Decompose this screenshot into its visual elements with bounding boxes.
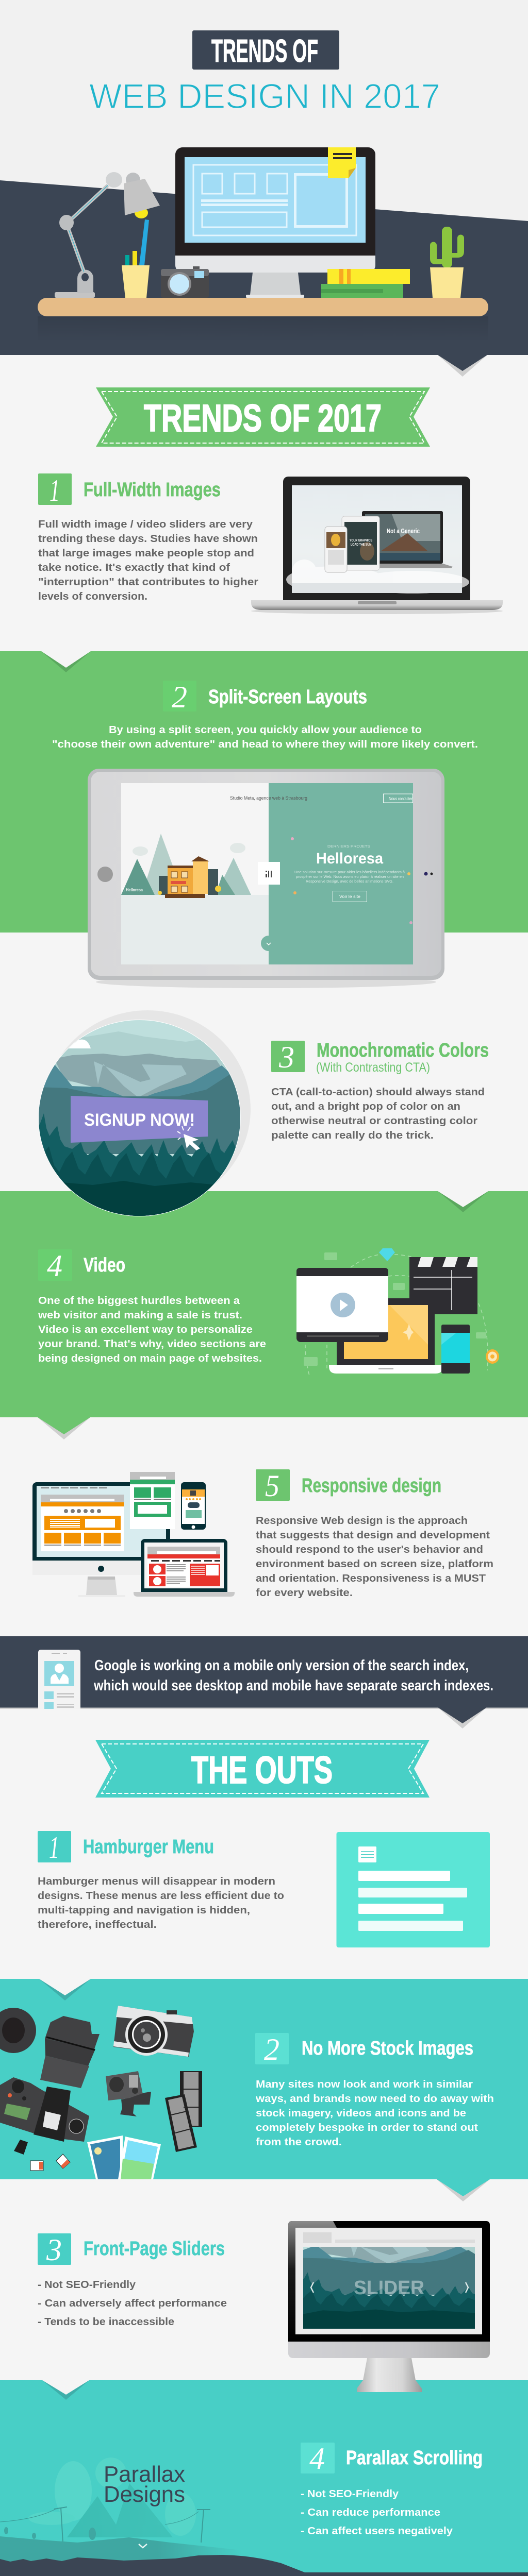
body text: [38, 1876, 284, 1930]
tablet mockup: Helloresa: [316, 850, 383, 867]
number badge 1: 1: [49, 1831, 59, 1865]
panel: parallax teal band: [0, 2380, 528, 2576]
number badge 3: 3: [46, 2233, 62, 2267]
panel: video green band: [0, 1191, 528, 1439]
outs 2: no more stock images: [255, 2032, 494, 2148]
outs 4: parallax scrolling: [301, 2442, 483, 2537]
photography gear illustration: [0, 2006, 202, 2179]
heading: Full-Width Images: [84, 479, 221, 501]
banner: trends of 2017: TRENDS OF 2017: [144, 397, 382, 439]
bullet list: - Can adversely affect performance: [38, 2298, 227, 2309]
parallax designs wordmark: [104, 2462, 185, 2507]
laptop mockup: Not a Generic: [387, 527, 420, 535]
number badge 3: 3: [278, 1040, 294, 1074]
bullet list: [38, 2279, 227, 2328]
header dark slanted panel with pointer: [0, 180, 528, 377]
icon: lens cap: [0, 2008, 36, 2053]
panel: footer with hill: [0, 2555, 528, 2576]
body text: [38, 519, 258, 602]
bullet list: - Tends to be inaccessible: [38, 2316, 174, 2328]
number badge 5: [256, 1469, 290, 1503]
body text: [255, 2079, 494, 2148]
number badge 4: 4: [309, 2442, 325, 2476]
body text: By using a split screen, you quickly allow your audience to: [109, 724, 422, 736]
number badge 2: 2: [264, 2032, 279, 2066]
number badge 4: [301, 2442, 335, 2476]
icon: photo prints: [87, 2136, 161, 2179]
body text: Full width image / video sliders are very: [38, 519, 253, 530]
body text: levels of conversion.: [38, 591, 147, 602]
split-screen landscape illustration: [121, 834, 251, 898]
body text: from the crowd.: [256, 2137, 342, 2148]
body text: being designed on main page of websites.: [38, 1353, 262, 1364]
body text: [271, 1087, 485, 1141]
body text: One of the biggest hurdles between a: [38, 1295, 240, 1307]
header background: [0, 0, 528, 355]
tablet mockup: Responsive Design, avec de belles animations SVG.: [306, 880, 393, 884]
icon: mobile profile: [38, 1650, 80, 1709]
section 3: circle shadow: [44, 1010, 251, 1208]
number badge 1: [38, 1831, 71, 1865]
body text: stock imagery, videos and icons and be: [256, 2108, 466, 2119]
desk: [38, 298, 488, 316]
icon: camera: [161, 266, 209, 298]
title: web design in 2017: WEB DESIGN IN 2017: [89, 77, 440, 116]
subheading: (With Contrasting CTA): [316, 1060, 430, 1075]
tablet mockup: Studio Meta, agence web à Strasbourg: [230, 795, 307, 801]
hamburger menu panel: [336, 1832, 490, 1947]
body text: otherwise neutral or contrasting color: [271, 1115, 477, 1127]
icon: cactus: [430, 227, 464, 298]
icon: desktop monitor: [175, 147, 375, 298]
tablet mockup: Voir le site: [339, 894, 361, 899]
icon: memory cards: [14, 2140, 70, 2171]
monochromatic scene circle: [36, 1018, 242, 1218]
body text: Hamburger menus will disappear in modern: [38, 1876, 275, 1887]
icon: retro camera: [113, 2006, 194, 2057]
tablet mockup: DERNIERS PROJETS: [327, 845, 370, 849]
body text: out, and a bright pop of color on an: [271, 1101, 460, 1112]
body text: Many sites now look and work in similar: [256, 2079, 473, 2090]
number badge 2: 2: [172, 680, 187, 714]
body text: that suggests that design and development: [256, 1530, 490, 1541]
icon: desk lamp: [55, 172, 160, 298]
body text: Video is an excellent way to personalize: [38, 1324, 253, 1335]
outs 3: front-page sliders: [38, 2219, 490, 2392]
bullet list: [301, 2488, 453, 2537]
number badge 2: [163, 680, 196, 714]
panel: split-screen green band: [0, 651, 528, 933]
banner: trends of 2017: [96, 387, 430, 447]
section 5: responsive design text: [256, 1469, 493, 1599]
heading: Split-Screen Layouts: [208, 686, 367, 708]
body text: [256, 1515, 493, 1599]
panel: stock images teal band: [0, 1979, 528, 2201]
body text: CTA (call-to-action) should always stand: [271, 1087, 485, 1098]
body text: trending these days. Studies have shown: [38, 533, 258, 545]
laptop mockup: LOAD THE SUN: [351, 543, 371, 547]
banner: the outs: [95, 1740, 430, 1798]
body text: [38, 1295, 266, 1364]
tablet mockup: Une solution sur-mesure pour aider les hôteliers indépendants à: [294, 871, 405, 874]
body text: "choose their own adventure" and head to where they will more likely convert.: [52, 739, 478, 750]
heading: No More Stock Images: [302, 2038, 473, 2059]
tablet mockup: Nous contacter: [389, 796, 412, 801]
body text: palette can really do the trick.: [271, 1130, 434, 1141]
parallax designs wordmark: Parallax: [104, 2462, 185, 2487]
heading: Video: [84, 1255, 125, 1276]
body text: environment based on screen size, platform: [256, 1558, 493, 1570]
body text: and orientation. Responsiveness is a MUST: [256, 1573, 486, 1584]
banner: the outs: THE OUTS: [191, 1749, 333, 1791]
callout text: [93, 1657, 493, 1694]
icon: action camera: [106, 2071, 151, 2116]
heading: Responsive design: [302, 1475, 441, 1497]
signup button: [71, 1096, 208, 1143]
signup button: SIGNUP NOW!: [84, 1110, 195, 1130]
icon: books: [321, 269, 410, 298]
body text: Responsive Web design is the approach: [256, 1515, 468, 1527]
tablet mockup: [88, 769, 444, 988]
heading badge: trends of: TRENDS OF: [211, 33, 318, 69]
icon: cursor: [177, 1126, 200, 1150]
body text: completely bespoke in order to stand out: [256, 2122, 478, 2133]
icon: film strips: [165, 2071, 202, 2152]
outs 1: hamburger menu: [38, 1831, 490, 1947]
body text: ways, and brands now need to do away with: [255, 2093, 494, 2105]
heading: Hamburger Menu: [83, 1836, 214, 1858]
tablet mockup: 7. Helloresa: [122, 888, 143, 892]
section 5: responsive illustration: [32, 1472, 235, 1597]
section 3: monochromatic colors text: [271, 1040, 489, 1141]
parallax designs wordmark: Designs: [104, 2482, 185, 2507]
number badge 4: 4: [47, 1249, 62, 1283]
video devices illustration: [296, 1248, 499, 1376]
heading badge: trends of: [192, 30, 339, 70]
number badge 5: 5: [265, 1469, 279, 1503]
bullet list: - Can affect users negatively: [301, 2526, 453, 2537]
number badge 2: [255, 2032, 289, 2066]
section 2: split-screen layouts: [52, 680, 478, 988]
tablet mockup: prospérer sur le Web. Nous avons eu plaisir à réaliser un site en: [296, 875, 404, 879]
number badge 1: 1: [50, 473, 60, 507]
body text: designs. These menus are less efficient due to: [38, 1890, 284, 1902]
body text: "interruption" that contributes to higher: [38, 577, 258, 588]
bullet list: - Not SEO-Friendly: [38, 2279, 136, 2291]
laptop mockup: YOUR GRAPHICS: [350, 539, 372, 543]
heading: Parallax Scrolling: [346, 2447, 483, 2469]
parallax landscape illustration: [0, 2458, 242, 2562]
body text: for every website.: [256, 1587, 353, 1599]
bullet list: - Not SEO-Friendly: [301, 2488, 399, 2500]
body text: [52, 724, 478, 750]
monitor with slider mockup: SLIDER: [354, 2277, 424, 2299]
heading: Front-Page Sliders: [84, 2238, 225, 2260]
number badge 3: [271, 1040, 305, 1074]
section 1: full-width images: [38, 473, 503, 614]
number badge 4: [38, 1249, 72, 1283]
body text: therefore, ineffectual.: [38, 1919, 157, 1930]
body text: should respond to the user's behavior and: [256, 1544, 483, 1555]
number badge 3: [38, 2233, 71, 2267]
body text: take notice. It's exactly that kind of: [38, 562, 230, 573]
bullet list: - Can reduce performance: [301, 2507, 440, 2518]
icon: dslr camera: [0, 2016, 100, 2142]
body text: your brand. That's why, video sections are: [38, 1338, 266, 1350]
body text: web visitor and making a sale is trust.: [38, 1310, 242, 1321]
heading: Monochromatic Colors: [317, 1040, 489, 1061]
monitor with slider mockup: [288, 2219, 490, 2392]
body text: multi-tapping and navigation is hidden,: [38, 1905, 250, 1916]
icon: sticky note: [328, 147, 356, 178]
icon: pencil cup: [122, 219, 150, 298]
number badge 1: [38, 473, 72, 507]
body text: that large images make people stop and: [38, 548, 254, 559]
panel: google callout band: [0, 1636, 528, 1728]
laptop mockup: [251, 477, 503, 614]
section 4: video: [38, 1248, 499, 1376]
